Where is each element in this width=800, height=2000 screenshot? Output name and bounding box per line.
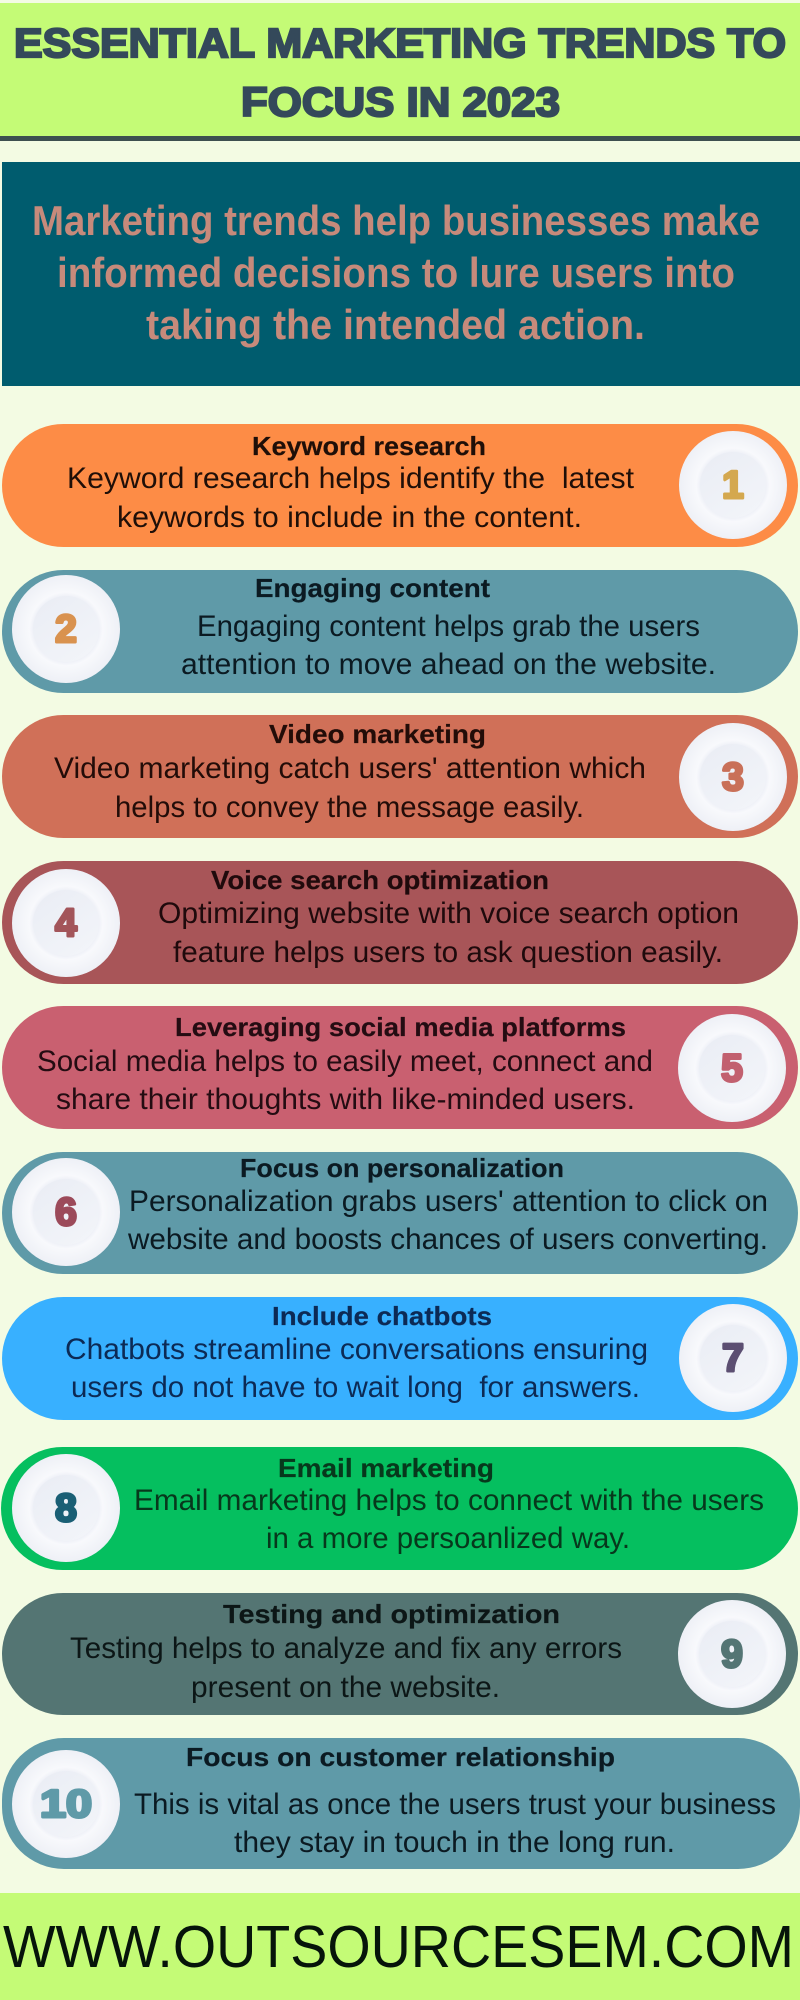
- panel: trend 8 email marketing: [1, 1447, 798, 1570]
- heading and description: Engaging content: [255, 573, 490, 603]
- heading and description: attention to move ahead on the website.: [181, 648, 716, 681]
- heading and description: [158, 865, 739, 969]
- footer banner: [0, 1893, 800, 2000]
- number badge 9: 9: [721, 1633, 743, 1676]
- title: [14, 20, 786, 125]
- intro text: informed decisions to lure users into: [57, 249, 735, 296]
- number badge 7: [679, 1304, 787, 1412]
- number badge 1: 1: [722, 464, 744, 507]
- heading and description: Focus on customer relationship: [186, 1742, 615, 1772]
- intro text: taking the intended action.: [146, 301, 645, 348]
- heading and description: [65, 1301, 648, 1404]
- panel: trend 4 voice search optimization: [2, 861, 798, 984]
- heading and description: feature helps users to ask question easily.: [173, 936, 723, 969]
- heading and description: Voice search optimization: [211, 865, 549, 895]
- heading and description: This is vital as once the users trust your business: [134, 1788, 776, 1821]
- number badge 1: [679, 431, 787, 539]
- number badge 2: 2: [55, 608, 77, 651]
- number badge 5: 5: [721, 1047, 743, 1090]
- heading and description: [37, 1012, 653, 1116]
- heading and description: users do not have to wait long for answers.: [71, 1371, 640, 1404]
- number badge 3: 3: [722, 756, 744, 799]
- heading and description: Keyword research: [252, 431, 486, 461]
- title: FOCUS IN 2023: [241, 79, 560, 125]
- heading and description: helps to convey the message easily.: [115, 791, 584, 824]
- heading and description: Testing and optimization: [223, 1599, 560, 1629]
- heading and description: [181, 573, 716, 681]
- number badge 10: 10: [40, 1783, 92, 1826]
- intro text: [32, 197, 760, 348]
- heading and description: in a more persoanlized way.: [266, 1522, 630, 1555]
- panel: trend 7 chatbots: [2, 1297, 798, 1420]
- heading and description: Focus on personalization: [240, 1153, 564, 1183]
- panel: trend 10 customer relationship: [2, 1738, 800, 1869]
- panel: trend 2 engaging content: [2, 570, 798, 693]
- heading and description: website and boosts chances of users converting.: [127, 1223, 768, 1256]
- heading and description: [70, 1599, 622, 1704]
- heading and description: Keyword research helps identify the latest: [67, 462, 635, 495]
- heading and description: share their thoughts with like-minded users.: [56, 1083, 635, 1116]
- heading and description: Leveraging social media platforms: [175, 1012, 626, 1042]
- number badge 4: 4: [55, 902, 77, 945]
- heading and description: [134, 1742, 776, 1859]
- number badge 7: 7: [722, 1337, 744, 1380]
- title banner: [0, 3, 800, 141]
- panel: trend 5 social media: [2, 1006, 798, 1129]
- heading and description: [134, 1453, 764, 1555]
- number badge 3: [679, 723, 787, 831]
- heading and description: Video marketing: [269, 719, 486, 749]
- heading and description: present on the website.: [191, 1671, 500, 1704]
- heading and description: Engaging content helps grab the users: [197, 610, 700, 643]
- panel: trend 1 keyword research: [2, 424, 798, 547]
- heading and description: Optimizing website with voice search option: [158, 897, 739, 930]
- heading and description: [127, 1153, 768, 1256]
- heading and description: Email marketing helps to connect with the users: [134, 1484, 764, 1517]
- panel: trend 9 testing and optimization: [2, 1593, 798, 1715]
- number badge 8: 8: [55, 1487, 77, 1530]
- heading and description: Chatbots streamline conversations ensuring: [65, 1333, 648, 1366]
- number badge 4: [12, 869, 120, 977]
- number badge 10: [12, 1750, 120, 1858]
- title: ESSENTIAL MARKETING TRENDS TO: [14, 20, 786, 66]
- heading and description: Email marketing: [278, 1453, 494, 1483]
- heading and description: Video marketing catch users' attention which: [54, 752, 646, 785]
- panel: trend 6 personalization: [2, 1152, 798, 1274]
- number badge 2: [12, 575, 120, 683]
- number badge 9: [678, 1600, 786, 1708]
- number badge 5: [678, 1014, 786, 1122]
- number badge 8: [12, 1454, 120, 1562]
- heading and description: Personalization grabs users' attention to click on: [129, 1185, 768, 1218]
- number badge 6: [12, 1158, 120, 1266]
- heading and description: Testing helps to analyze and fix any errors: [70, 1632, 622, 1665]
- number badge 6: 6: [55, 1191, 77, 1234]
- heading and description: keywords to include in the content.: [117, 501, 582, 534]
- heading and description: [67, 431, 635, 534]
- panel: trend 3 video marketing: [2, 715, 798, 838]
- heading and description: [54, 719, 646, 824]
- heading and description: Include chatbots: [272, 1301, 492, 1331]
- heading and description: they stay in touch in the long run.: [234, 1826, 675, 1859]
- heading and description: Social media helps to easily meet, connect and: [37, 1045, 653, 1078]
- intro panel: [2, 162, 800, 386]
